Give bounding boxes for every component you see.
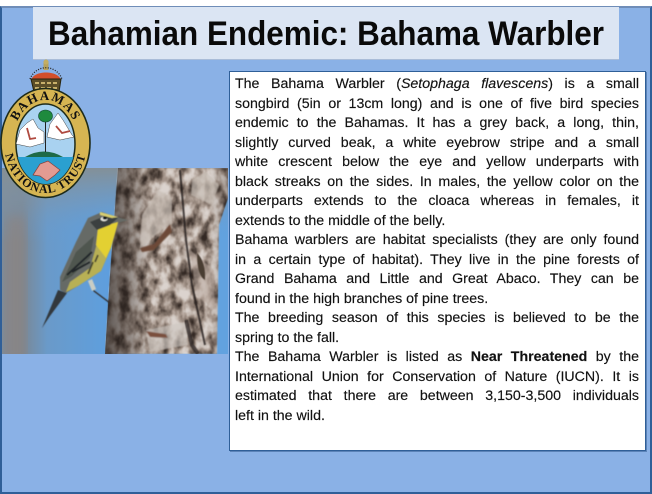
- leg: [90, 282, 110, 303]
- paragraph: description: white crescent below the eye and yellow underparts with: [235, 154, 639, 170]
- paragraph: description: songbird (5in or 13cm long) and is one of five bird species: [235, 96, 639, 112]
- paragraph: description: endemic to the Bahamas. It has a grey back, a long, thin,: [235, 115, 639, 131]
- paragraph: breeding season: The breeding season of this species is believed to be the: [235, 310, 639, 326]
- paragraph: description: slightly curved beak, a white eyebrow stripe and a small: [235, 134, 639, 150]
- badge: BAHAMAS: [10, 92, 80, 121]
- crown: [30, 60, 62, 92]
- paragraph: habitat: [235, 232, 640, 306]
- paragraph: conservation status: International Union for Conservation of Nature (IUCN). It is: [235, 368, 639, 384]
- badge: NATIONAL TRUST: [5, 152, 85, 194]
- paragraph: conservation status: The Bahama Warbler is listed as Near Threatened by the: [235, 349, 639, 365]
- paragraph: conservation status: left in the wild.: [235, 408, 325, 424]
- paragraph: conservation status: estimated that there are between 3,150-3,500 individuals: [235, 388, 639, 404]
- description text panel: [229, 71, 646, 451]
- tail: [42, 290, 67, 328]
- photo: Bahama warbler on pine trunk: [2, 168, 228, 354]
- logo: Bahamas National Trust: [0, 60, 91, 198]
- paragraph: conservation status: [235, 349, 639, 424]
- head: [90, 216, 118, 230]
- paragraph: breeding season: spring to the fall.: [235, 330, 339, 346]
- paragraph: habitat: Bahama warblers are habitat specialists (they are only found: [235, 232, 639, 248]
- paragraph: description: extends to the middle of the belly.: [235, 212, 445, 228]
- body: [60, 212, 128, 293]
- paragraph: breeding season: [235, 310, 639, 346]
- paragraph: habitat: found in the high branches of pine trees.: [235, 290, 488, 306]
- paragraph: description: underparts extends to the cloaca whereas in females, it: [235, 193, 639, 209]
- paragraph: description: The Bahama Warbler (Setophaga flavescens) is a small: [235, 76, 639, 92]
- tree trunk: [105, 168, 228, 354]
- wing: [62, 236, 94, 282]
- paragraph: habitat: Grand Bahama and Little and Great Abaco. They can be: [235, 271, 639, 287]
- paragraph: description: [234, 76, 639, 228]
- title banner: [33, 7, 619, 59]
- paragraph: description: black streaks on the sides. In males, the yellow color on the: [235, 174, 639, 190]
- badge: [0, 88, 91, 198]
- bird: [42, 212, 128, 328]
- paragraph: habitat: in a certain type of habitat). They live in the pine forests of: [235, 252, 639, 268]
